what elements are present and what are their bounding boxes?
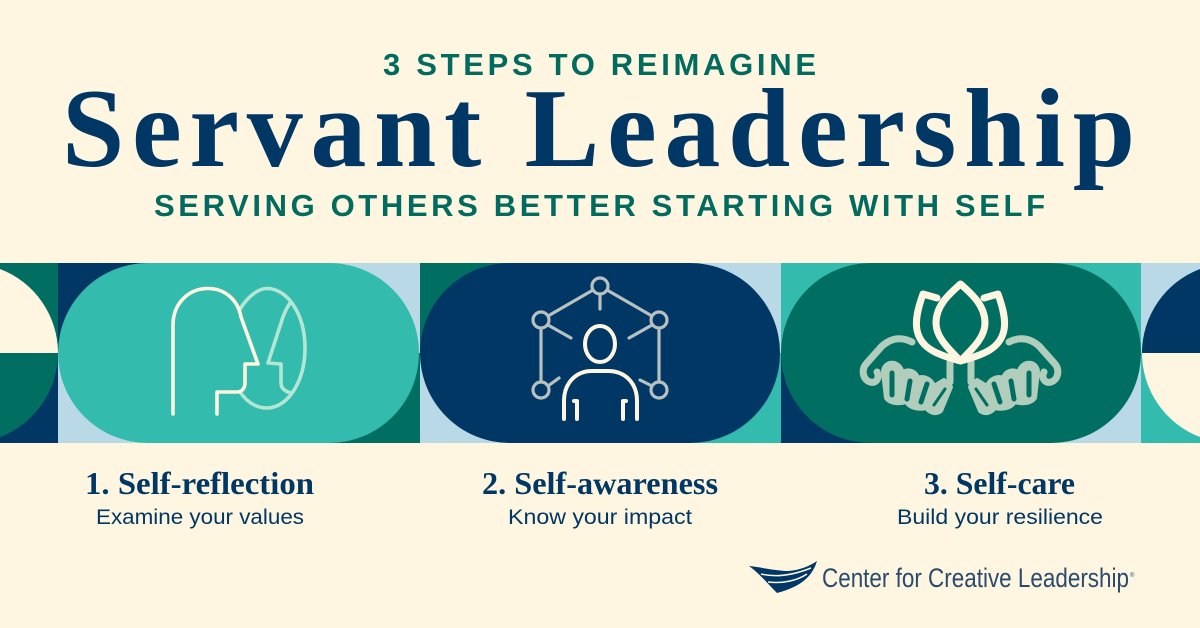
step 2 text: Know your impact	[508, 506, 692, 529]
step 1 text	[85, 465, 314, 529]
decorative tile band	[0, 263, 1200, 443]
right edge tile	[1141, 263, 1200, 443]
step 3 text: 3. Self-care	[924, 465, 1075, 501]
subtitle: SERVING OTHERS BETTER STARTING WITH SELF	[154, 188, 1045, 223]
step 1 text: 1. Self-reflection	[85, 465, 314, 501]
step 2 text	[482, 465, 718, 529]
icon: two facing profiles	[173, 288, 305, 414]
logo wordmark: Center for Creative Leadership	[822, 563, 1129, 593]
step 2 text: 2. Self-awareness	[482, 465, 718, 501]
icon: person with network	[533, 278, 667, 419]
panel: self-care tile	[781, 263, 1141, 443]
panel: self-awareness tile	[420, 263, 781, 443]
icon: hands holding lotus	[863, 284, 1058, 413]
step 1 text: Examine your values	[96, 506, 304, 529]
left edge tile	[0, 263, 58, 443]
step 3 text	[897, 465, 1103, 529]
icon: wing mark	[749, 561, 817, 593]
main title: Servant Leadership	[62, 67, 1135, 191]
eyebrow heading: 3 STEPS TO REIMAGINE	[383, 47, 816, 82]
logo: Center for Creative Leadership	[749, 561, 1135, 593]
step 3 text: Build your resilience	[897, 506, 1103, 529]
registered mark: ®	[1130, 572, 1135, 579]
panel: self-reflection tile	[58, 263, 420, 443]
